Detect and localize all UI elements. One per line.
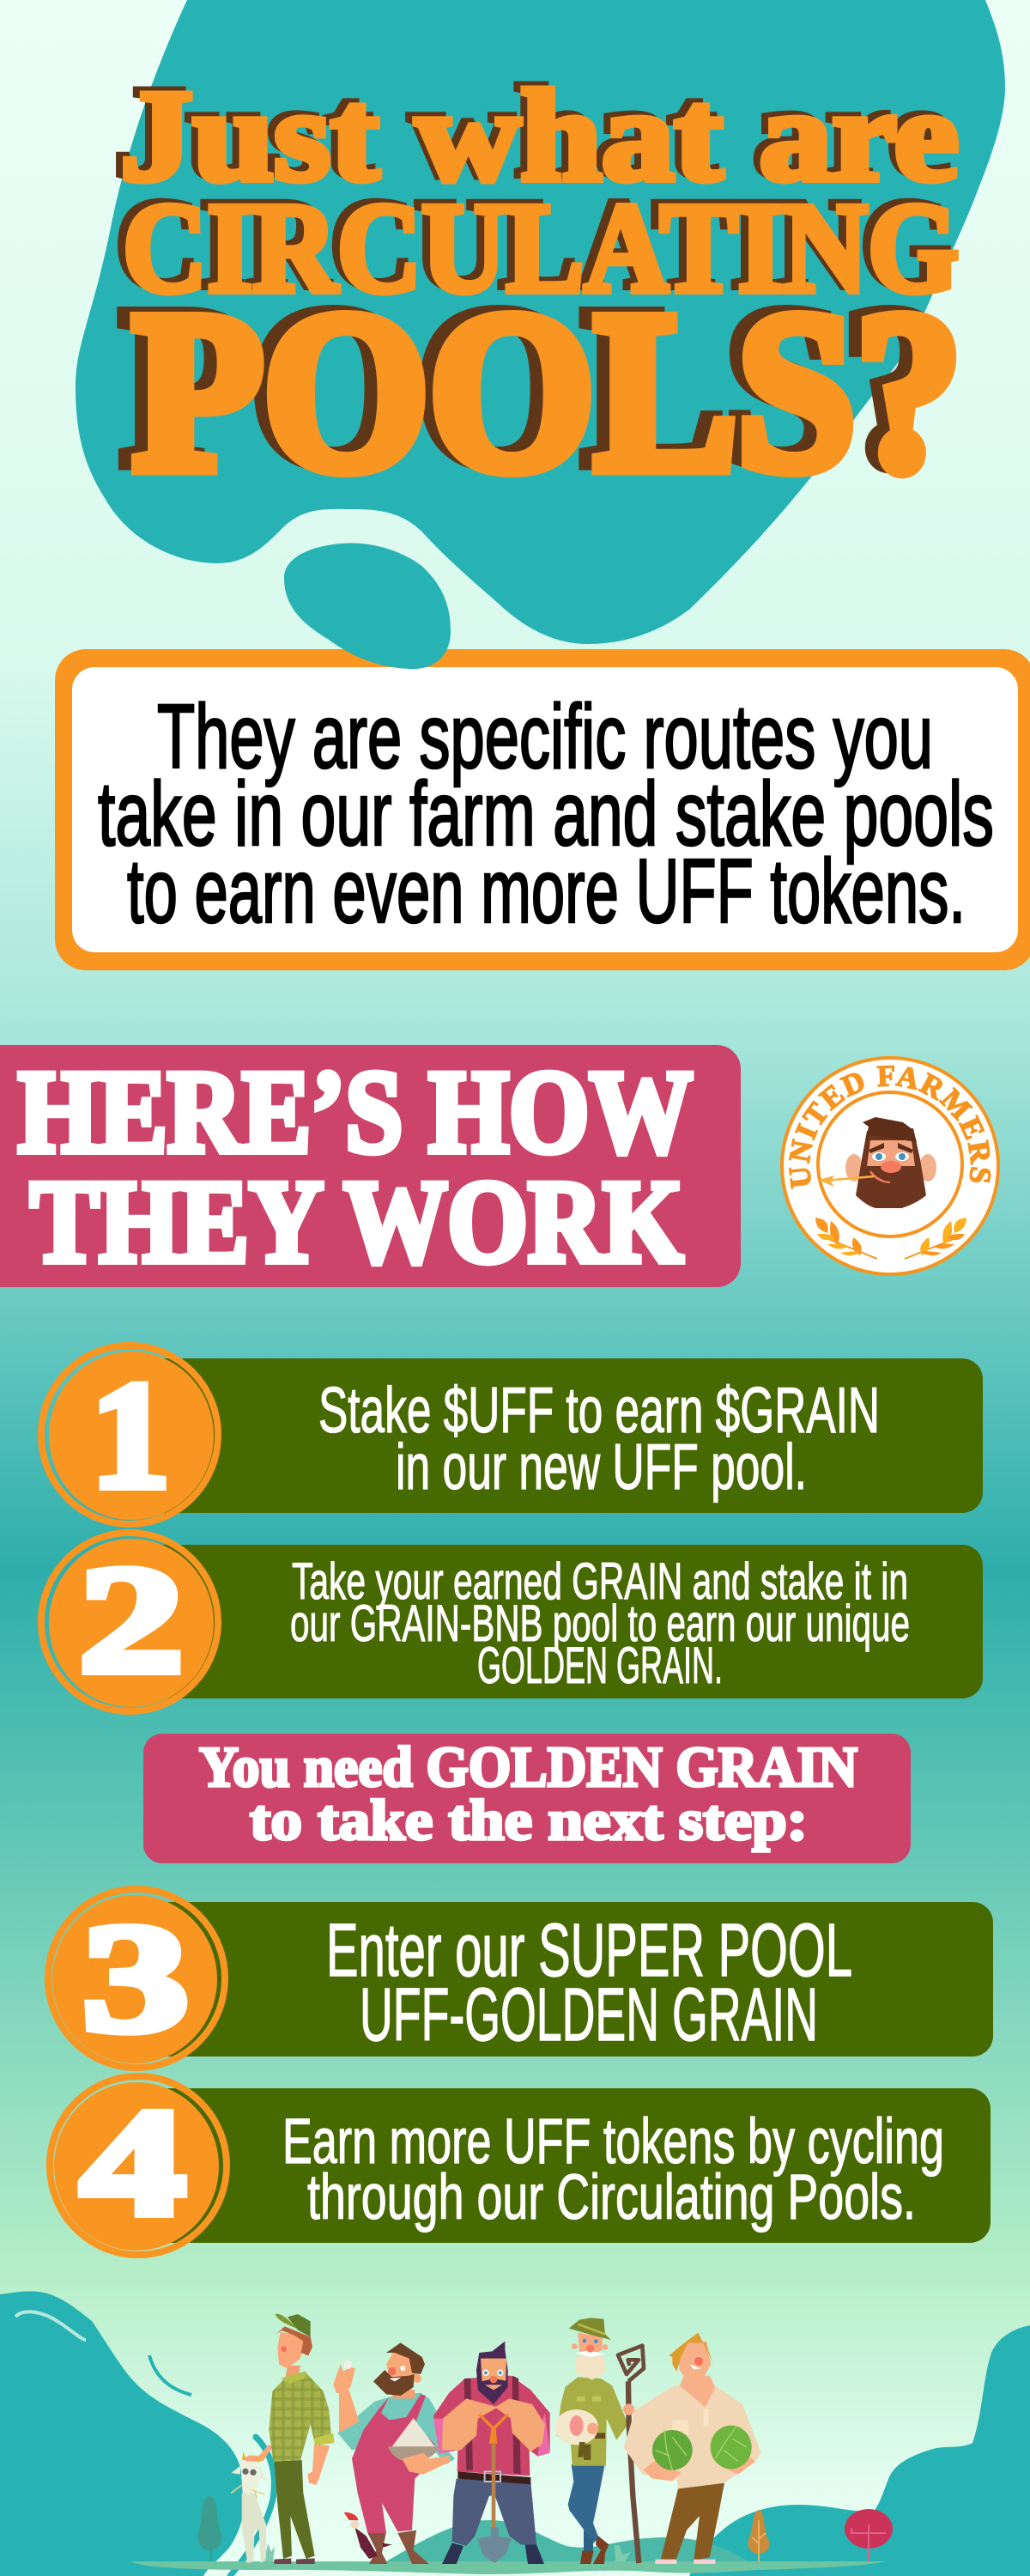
badge 2 xyxy=(41,1533,218,1711)
badge 3 xyxy=(48,1889,225,2068)
step 4 xyxy=(50,2076,991,2255)
tree left xyxy=(197,2496,221,2561)
step 2: GOLDEN GRAIN. xyxy=(477,1637,723,1694)
callout: you need golden grain: to take the next step: xyxy=(250,1789,808,1852)
step 1 xyxy=(41,1346,983,1524)
banner: here's how they work: HERE’S HOW xyxy=(18,1046,693,1177)
banner: here's how they work xyxy=(0,1045,741,1287)
left hill xyxy=(0,2291,245,2576)
white streaks xyxy=(15,2312,86,2340)
farmer 4 with hat, white beard and sheep xyxy=(554,2318,628,2564)
badge 4: 4 xyxy=(81,2077,185,2247)
distant hills xyxy=(386,2520,748,2561)
banner: here's how they work: THEY WORK xyxy=(30,1156,683,1287)
logo: united farmers xyxy=(780,1056,1000,1276)
right hill xyxy=(689,2325,1030,2576)
farmer 3 with purple hair and spade xyxy=(433,2342,550,2564)
tree orange xyxy=(748,2510,769,2561)
shepherd staff xyxy=(618,2346,644,2563)
teal ribbon xyxy=(230,2437,274,2576)
title: Just what are xyxy=(113,59,952,204)
farmers right group xyxy=(554,2318,761,2564)
callout: you need golden grain xyxy=(143,1734,911,1863)
icon: farmer face xyxy=(818,1117,936,1208)
grass tufts xyxy=(264,2543,631,2561)
title: CIRCULATING xyxy=(123,177,959,319)
logo: united farmers: UNITED FARMERS xyxy=(788,1065,991,1189)
title: POOLS? xyxy=(133,266,962,518)
title xyxy=(113,59,962,518)
tree red xyxy=(845,2509,893,2561)
icon: wheat right xyxy=(905,1218,966,1259)
goat xyxy=(231,2451,267,2563)
badge 3: 3 xyxy=(82,1893,189,2063)
teal blob behind title xyxy=(76,0,1005,644)
icon: wheat left xyxy=(815,1218,877,1259)
title: CIRCULATING xyxy=(115,173,951,315)
step 3 xyxy=(48,1889,993,2068)
rooster xyxy=(344,2512,392,2559)
callout: you need golden grain: You need GOLDEN GRAIN xyxy=(199,1735,857,1799)
badge 4 xyxy=(50,2076,227,2255)
title: POOLS? xyxy=(120,261,949,513)
farmer 1 with cap and plaid shirt xyxy=(243,2314,334,2564)
landscape xyxy=(0,2291,1030,2576)
farmers left group xyxy=(231,2314,550,2564)
teal drop xyxy=(284,543,451,669)
title: Just what are xyxy=(120,64,959,208)
step 1: in our new UFF pool. xyxy=(396,1431,807,1503)
badge 1: 1 xyxy=(91,1350,170,1520)
step 2 xyxy=(41,1533,983,1711)
definition box xyxy=(55,649,1030,970)
badge 1 xyxy=(41,1346,218,1524)
farmer 5 with cream shirt and cabbages xyxy=(624,2333,761,2564)
ground xyxy=(130,2561,887,2574)
farmer 2 with beard and overalls xyxy=(333,2342,455,2564)
badge 2: 2 xyxy=(79,1534,184,1704)
